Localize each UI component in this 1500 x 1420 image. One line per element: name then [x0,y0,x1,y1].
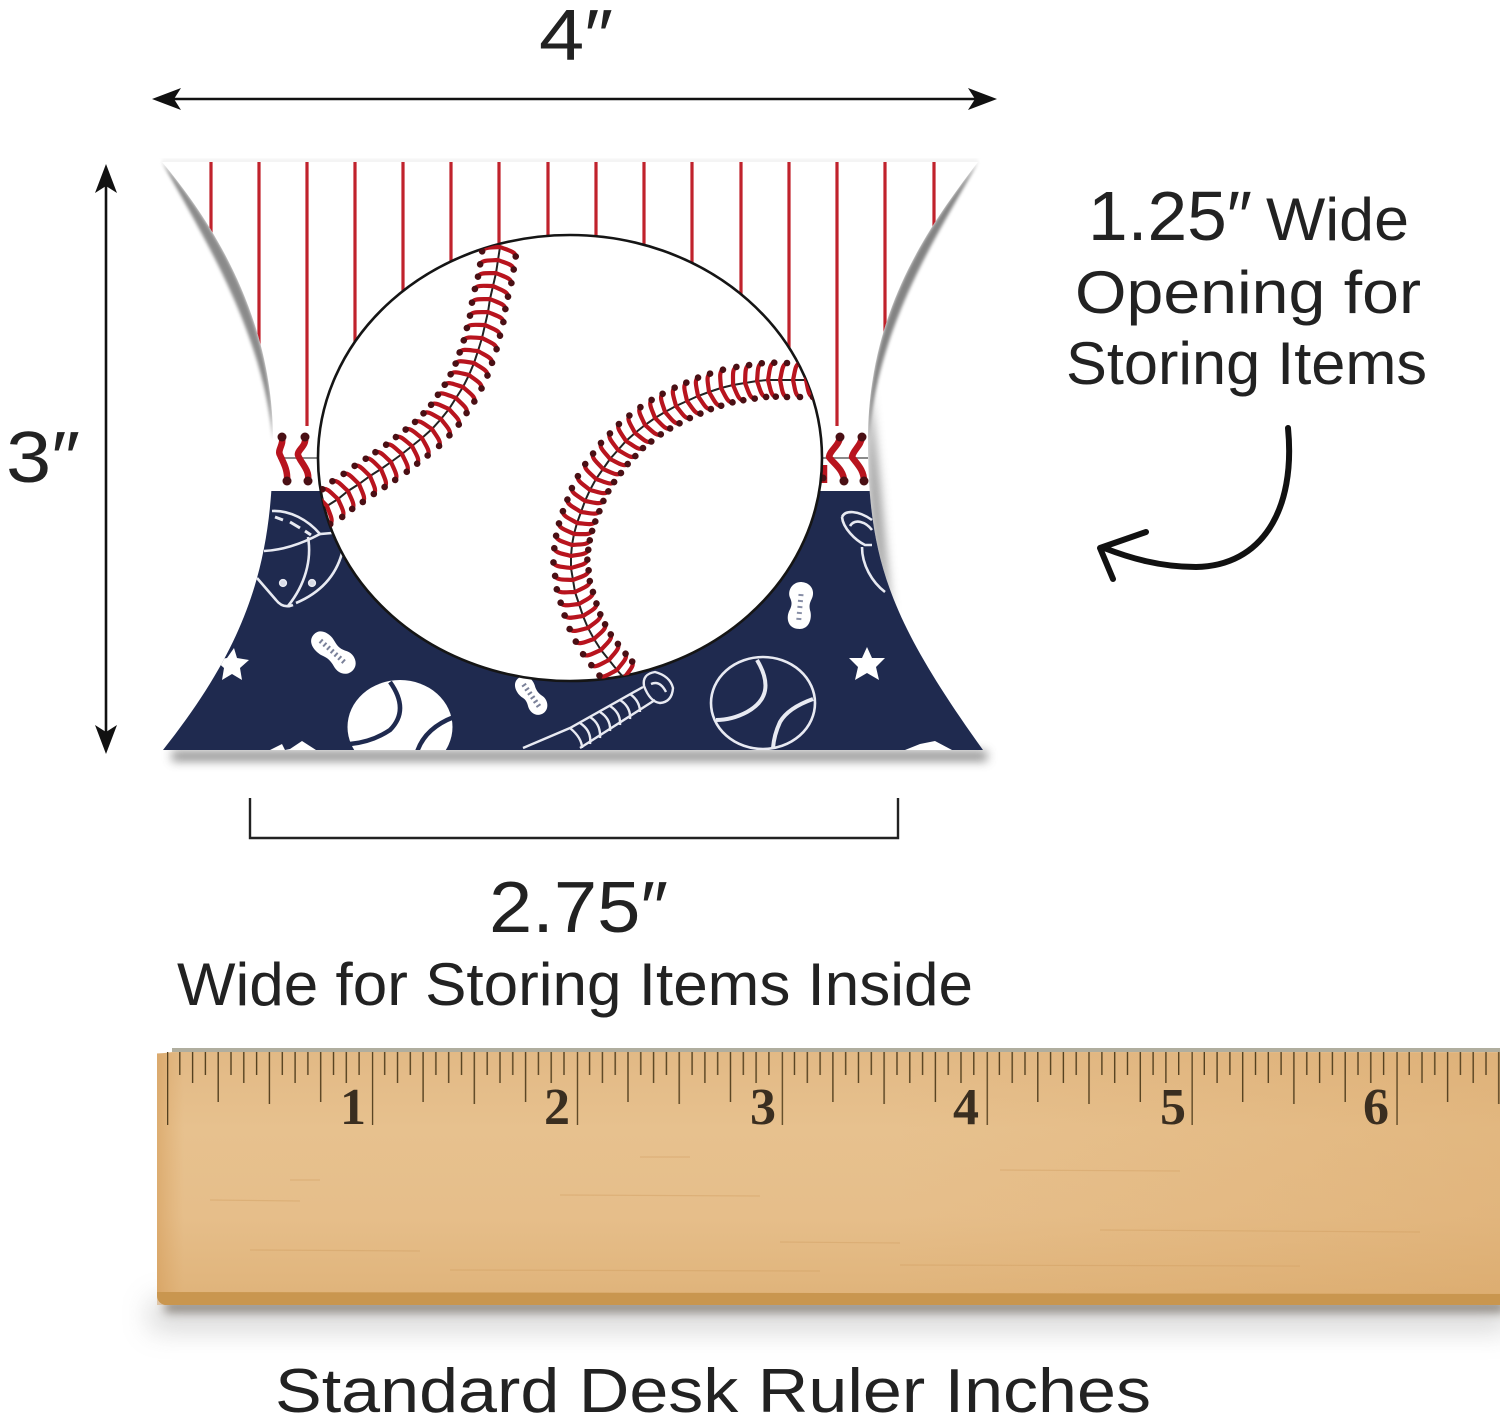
side stitches right [820,432,868,486]
pinstripes [211,162,934,426]
icon: star left [220,648,249,680]
width dimension arrow [152,88,997,110]
ruler tick marks [167,1052,1500,1128]
inner width value: 2.75″ [489,868,668,948]
ruler numerals: 4 [953,1079,979,1136]
opening callout text: Opening for [1075,259,1421,326]
icon: partial shapes at bottom edge [270,741,952,750]
seam left [327,247,500,506]
ruler numerals: 1 [340,1079,366,1136]
icon: peanut right [788,582,814,629]
inner width caption: Wide for Storing Items Inside [177,951,973,1018]
icon: outlined ball [711,657,815,749]
pillow box shadow [162,159,987,761]
height label 3 inches: 3″ [6,418,80,498]
pillow box [150,155,1000,774]
ruler metal edge [172,1048,1500,1054]
inner width bracket [250,798,898,838]
ruler wood grain [210,1157,1420,1271]
icon: filled ball [348,680,452,750]
icon: catcher mitt left [257,511,342,606]
ruler numerals [340,1079,1389,1136]
ruler numerals: 5 [1160,1079,1186,1136]
icon: star right [849,647,885,680]
opening callout text: 1.25″ [1088,177,1252,255]
icon: peanut left [311,631,356,674]
baseball circle [318,235,822,681]
height dimension arrow [95,164,117,754]
ruler numerals: 3 [750,1079,776,1136]
icon: peanut centre [514,678,548,715]
ruler wood body [157,1052,1500,1305]
ruler numerals: 6 [1363,1079,1389,1136]
ruler [150,1048,1500,1330]
curved arrow [1100,428,1289,579]
ruler numerals: 2 [544,1079,570,1136]
opening callout text: Wide [1266,186,1409,253]
side stitches left [278,432,318,486]
opening callout text [1066,177,1427,397]
opening callout text: Storing Items [1066,330,1427,397]
ruler shadow [150,1300,1500,1330]
seam right [571,380,806,678]
icon: bat [523,672,673,748]
navy lower panel [150,491,1000,756]
icon: catcher mitt right [842,512,885,592]
ruler bottom bevel [157,1292,1500,1305]
